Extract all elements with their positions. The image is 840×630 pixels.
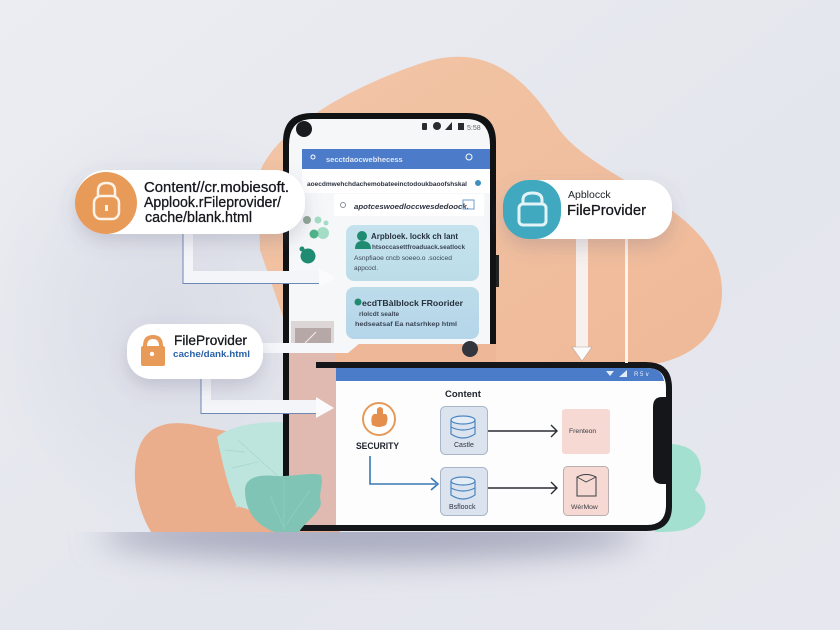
status icons: 5:58 — [467, 125, 481, 132]
Applock text: Apblocck — [568, 189, 611, 201]
status icons: R 5 ∨ — [634, 372, 649, 378]
peach background blob — [258, 57, 722, 366]
security arrow — [370, 456, 438, 490]
dark leaf — [245, 474, 322, 532]
arrow to frontend — [488, 425, 557, 437]
connector arrow from FileProvider badge — [201, 375, 334, 418]
status icons — [422, 122, 481, 132]
icon: orange lock — [75, 172, 137, 234]
status icons — [606, 370, 649, 378]
content label: Content — [445, 389, 482, 400]
notch — [653, 397, 672, 484]
search bar — [302, 149, 490, 169]
url line — [302, 169, 490, 193]
info card two: rlolcdt sealte — [359, 311, 399, 318]
security badge — [356, 403, 400, 452]
security badge: SECURITY — [356, 441, 400, 452]
camera — [296, 121, 312, 137]
URL text: Applook.rFileprovider/ — [144, 194, 282, 211]
URL text — [144, 179, 289, 226]
sidebar icons — [300, 216, 329, 264]
bottom left peach blob — [135, 423, 340, 532]
pink panel behind phone two — [289, 353, 336, 526]
frontend node: Frenteon — [569, 428, 596, 435]
info card one: htsoccasettfroaduack.seatlock — [372, 244, 465, 251]
address row — [334, 194, 484, 216]
phone one: vertical device — [283, 113, 499, 526]
info card one: appcocl. — [354, 265, 378, 272]
FileProvider text: FileProvider — [567, 202, 646, 219]
webview node: WérMow — [571, 504, 598, 511]
URL text: cache/blank.html — [145, 209, 252, 226]
arrow to webview — [488, 482, 557, 494]
phone screen — [289, 119, 490, 344]
white connector from FileProvider badge — [262, 343, 360, 353]
info card two — [346, 287, 479, 339]
FileProvider text: FileProvider — [174, 332, 247, 348]
info card one — [346, 225, 479, 281]
info card two: hedseatsaf Ea natsrhkep html — [355, 321, 457, 328]
balloon node: Bsfloock — [449, 504, 476, 511]
cache node — [440, 406, 488, 454]
balloon node — [440, 468, 488, 516]
info card one: Arpbloek. lockk ch lant — [371, 231, 458, 241]
cache node: Castle — [454, 442, 474, 449]
FileProvider badge — [127, 324, 263, 379]
floor shadow — [96, 532, 644, 578]
frontend node — [562, 409, 610, 454]
Applock badge — [503, 180, 672, 239]
URL text: Content//cr.mobiesoft. — [144, 179, 289, 196]
device frame — [300, 362, 672, 531]
device screen — [336, 368, 666, 525]
blue header — [336, 368, 664, 381]
phone body — [283, 113, 496, 526]
URL badge — [75, 170, 305, 234]
connector arrow from URL badge — [183, 230, 335, 287]
icon: teal lock — [503, 180, 561, 239]
webview node — [564, 466, 608, 516]
address row: apotceswoedloccwesdedoock. — [354, 204, 469, 211]
icon: small orange lock — [141, 337, 165, 366]
side button — [496, 255, 499, 287]
teal blob right — [650, 444, 706, 532]
thumbnail — [291, 321, 334, 345]
url line: aoecdmwehchdachemobateeinctodoukbaoofshskal — [307, 181, 467, 188]
info card two: ecdTBàlblock FRoorider — [362, 298, 464, 308]
phone two: horizontal device — [300, 362, 672, 531]
home button — [462, 341, 478, 357]
connector arrow from Applock badge — [572, 237, 628, 363]
light leaf — [217, 422, 300, 510]
search bar: secctdaocwebhecess — [326, 155, 403, 164]
cache path text: cache/dank.html — [173, 349, 250, 360]
info card one: Asnpfiaoe cncb soeeo.o .sociced — [354, 255, 452, 262]
